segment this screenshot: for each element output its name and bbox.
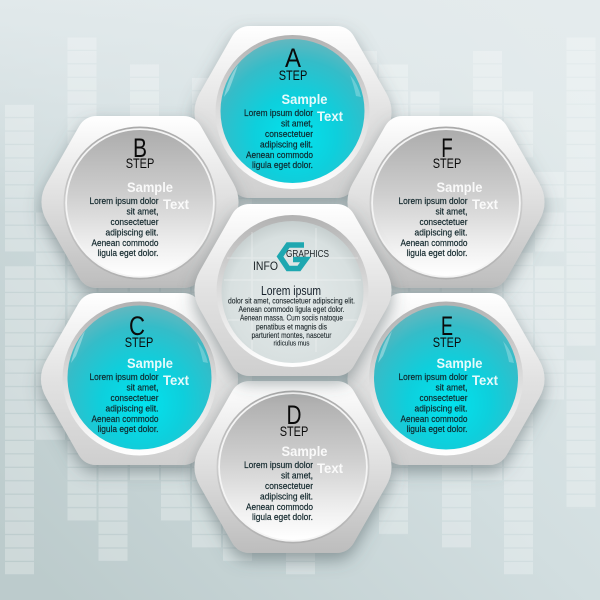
panel: step C: consectetuer xyxy=(110,392,158,403)
logo text: INFO xyxy=(253,261,278,273)
panel: step F: STEP xyxy=(433,155,461,171)
logo text: GRAPHICS xyxy=(286,248,329,260)
panel: step B: consectetuer xyxy=(110,216,158,227)
panel: step C: ligula eget dolor. xyxy=(98,423,158,434)
panel: step B xyxy=(41,116,239,288)
panel: step C: sit amet, xyxy=(126,382,158,392)
center text block: Lorem ipsum xyxy=(261,283,321,298)
panel: step E: Aenean commodo xyxy=(400,413,468,424)
panel: step A: Text xyxy=(317,108,343,124)
panel: step D: consectetuer xyxy=(265,480,313,491)
panel: step F: ligula eget dolor. xyxy=(406,247,468,258)
panel: step D: sit amet, xyxy=(281,470,313,480)
panel: step E: consectetuer xyxy=(420,392,468,403)
center text block: dolor sit amet, consectetuer adipiscing elit. xyxy=(228,296,355,306)
icon: G logo xyxy=(280,245,306,268)
panel: step A: ligula eget dolor. xyxy=(252,159,313,170)
panel: step C: adipiscing elit. xyxy=(106,402,158,414)
panel: step D: ligula eget dolor. xyxy=(252,511,313,522)
panel: step F: Text xyxy=(472,196,498,212)
panel: step E: adipiscing elit. xyxy=(414,402,468,414)
panel: step B: Text xyxy=(163,196,189,212)
panel: step B: Lorem ipsum dolor xyxy=(90,195,158,206)
panel: step B: sit amet, xyxy=(126,206,158,216)
panel: step A: consectetuer xyxy=(265,128,313,139)
logo text xyxy=(253,248,329,273)
center text block: Aenean commodo ligula eget dolor. xyxy=(238,305,344,314)
panel: step A: adipiscing elit. xyxy=(260,138,313,150)
panel: step D: D xyxy=(286,400,302,430)
panel: step D: Aenean commodo xyxy=(246,501,313,512)
panel: step F: Lorem ipsum dolor xyxy=(398,195,468,206)
panel: step F: Sample xyxy=(436,179,483,195)
panel: step F: adipiscing elit. xyxy=(414,226,468,238)
panel: step A: Sample xyxy=(282,91,328,107)
panel: step F: Aenean commodo xyxy=(400,237,468,248)
panel: step D: Lorem ipsum dolor xyxy=(244,459,313,470)
panel: step C xyxy=(41,293,238,465)
panel: step B: ligula eget dolor. xyxy=(98,247,158,258)
panel: step F: consectetuer xyxy=(420,216,468,227)
panel: step A xyxy=(194,26,392,198)
panel: step B: Sample xyxy=(127,179,173,195)
panel: center info xyxy=(194,204,392,376)
panel: step C: Lorem ipsum dolor xyxy=(90,371,158,382)
panel: step A: A xyxy=(285,43,301,73)
panel: step E: STEP xyxy=(433,334,461,350)
panel: step C: Sample xyxy=(127,355,173,371)
center text block: penatibus et magnis dis xyxy=(256,322,327,332)
panel: step E: Lorem ipsum dolor xyxy=(398,371,468,382)
panel: step E: Sample xyxy=(436,355,483,371)
panel: step A: Lorem ipsum dolor xyxy=(244,107,313,118)
center text block xyxy=(228,283,355,348)
panel: step F: F xyxy=(441,133,453,163)
center text block: parturient montes, nascetur xyxy=(252,331,332,340)
panel: step F: sit amet, xyxy=(436,206,468,216)
panel: step E: ligula eget dolor. xyxy=(406,423,468,434)
panel: step B: STEP xyxy=(126,155,154,171)
center text block: Aenean massa. Cum sociis natoque xyxy=(240,314,343,322)
panel: step A: sit amet, xyxy=(281,118,313,128)
panel: step D: Text xyxy=(317,460,343,476)
panel: step F xyxy=(347,116,545,288)
panel: step D xyxy=(194,381,392,553)
panel: step E: Text xyxy=(472,372,498,388)
panel: step A: STEP xyxy=(279,67,307,83)
panel: step D: adipiscing elit. xyxy=(260,490,313,502)
panel: step B: Aenean commodo xyxy=(92,237,158,248)
panel: step E xyxy=(347,293,545,465)
panel: step B: B xyxy=(133,133,147,163)
panel: step C: STEP xyxy=(125,334,153,350)
panel: step E: E xyxy=(441,311,453,341)
center text block: ridiculus mus xyxy=(274,340,310,348)
panel: step A: Aenean commodo xyxy=(246,149,313,160)
panel: step B: adipiscing elit. xyxy=(106,226,158,238)
panel: step C: Aenean commodo xyxy=(92,413,158,424)
panel: step E: sit amet, xyxy=(436,382,468,392)
panel: step D: STEP xyxy=(280,423,308,439)
panel: step C: Text xyxy=(163,372,189,388)
panel: step C: C xyxy=(129,311,145,341)
panel: step D: Sample xyxy=(282,443,328,459)
